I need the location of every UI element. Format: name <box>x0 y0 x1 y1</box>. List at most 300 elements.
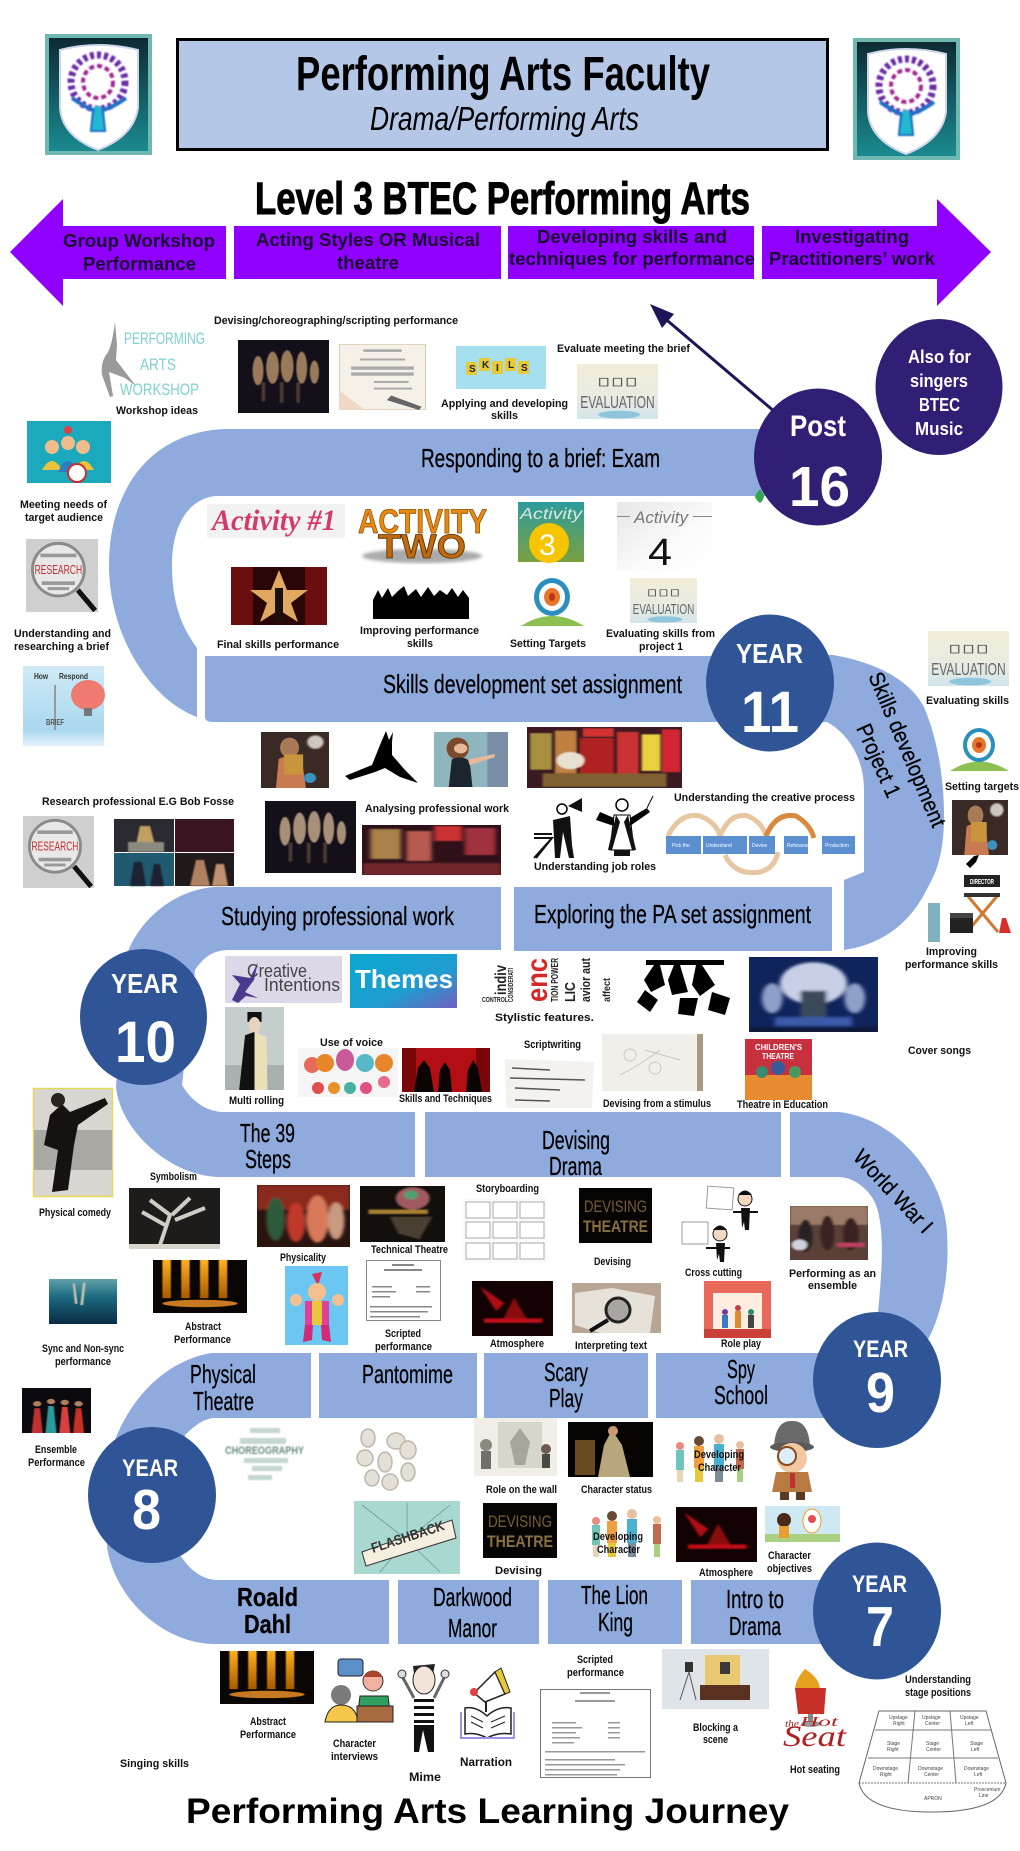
caption: Devising <box>594 1256 631 1268</box>
caption: Improving <box>926 946 977 958</box>
image: word cloud: CONSIDERATI <box>508 968 515 1002</box>
caption: Theatre in Education <box>737 1099 828 1111</box>
caption: scene <box>703 1734 728 1746</box>
caption: Scriptwriting <box>524 1039 581 1051</box>
road labels: Darkwood <box>433 1582 512 1612</box>
caption: Physical comedy <box>39 1207 112 1219</box>
badge: year 9: YEAR <box>853 1336 908 1363</box>
caption: project 1 <box>639 641 683 653</box>
badge: year 7: YEAR <box>852 1571 907 1598</box>
diagram: creative process: Understand <box>706 843 732 849</box>
caption: interviews <box>331 1751 378 1763</box>
image: performing arts workshop logo: ARTS <box>140 355 176 374</box>
diagram: creative process: Rehearse <box>787 843 809 849</box>
badge: year 8: YEAR <box>122 1455 178 1482</box>
road labels: Studying professional work <box>221 901 455 931</box>
image: activity 4: Activity <box>633 508 689 527</box>
road labels: World War I <box>848 1144 938 1238</box>
caption: Scripted <box>385 1328 421 1340</box>
image: the hot seat <box>783 1669 847 1753</box>
image: multi rolling <box>225 1007 284 1090</box>
image: crowd silhouette <box>373 586 469 619</box>
image: singer on stage <box>261 732 329 788</box>
road labels: Project 1 <box>851 720 906 801</box>
diagram: stage positions: Right <box>887 1747 899 1753</box>
caption: researching a brief <box>14 641 109 653</box>
caption: Narration <box>460 1755 512 1769</box>
caption: Abstract <box>185 1321 221 1333</box>
purple double arrow: Investigating <box>795 227 909 247</box>
diagram: creative process: Devise <box>752 843 768 849</box>
caption: objectives <box>767 1563 812 1575</box>
caption: Atmosphere <box>490 1338 544 1350</box>
image: children's theatre <box>745 1039 812 1100</box>
image: character figures <box>592 1509 661 1557</box>
image: the hot seat: the <box>785 1719 800 1730</box>
badge: also for singers <box>876 319 1002 455</box>
caption: performance <box>375 1341 432 1353</box>
image: physicality <box>257 1185 350 1247</box>
badge: year 11: YEAR <box>736 638 803 669</box>
image: character interview <box>325 1659 393 1722</box>
image: how to respond: Respond <box>59 672 88 681</box>
road labels: Exploring the PA set assignment <box>534 899 812 929</box>
caption: Meeting needs of <box>20 499 107 511</box>
image: dancers <box>238 340 329 413</box>
image: devising theatre: DEVISING <box>488 1512 552 1531</box>
image: target character <box>950 728 1009 771</box>
caption: Performance <box>28 1457 85 1469</box>
image: detective <box>770 1421 814 1500</box>
caption <box>905 946 998 971</box>
image: atmosphere <box>676 1507 757 1562</box>
caption: Setting targets <box>945 781 1019 793</box>
badge: year 11 <box>706 614 834 752</box>
road labels: Spy <box>727 1354 755 1384</box>
badge: year 7: 7 <box>866 1595 894 1659</box>
image: creative intentions: Intentions <box>264 975 340 995</box>
image: script page <box>366 1260 440 1320</box>
caption: Performance <box>174 1334 231 1346</box>
caption: Symbolism <box>150 1171 197 1183</box>
image: musical show <box>749 957 878 1032</box>
image: how to respond <box>23 666 105 746</box>
image: word cloud: enc <box>521 958 554 1002</box>
image: research magnifier <box>26 539 98 612</box>
caption: Blocking a <box>693 1722 739 1734</box>
diagram: stage positions: Line <box>979 1793 989 1799</box>
image: facial expressions <box>357 1429 416 1490</box>
diagram: stage positions: Downstage <box>964 1766 989 1772</box>
caption: Cover songs <box>908 1045 971 1057</box>
image: flashback banner <box>354 1501 460 1574</box>
image: symbolism <box>129 1188 220 1249</box>
caption <box>693 1722 739 1746</box>
caption: Atmosphere <box>699 1567 753 1579</box>
diagram: stage positions: Upstage <box>889 1715 908 1721</box>
caption: Character status <box>581 1484 652 1496</box>
image: creative intentions <box>225 956 342 1003</box>
diagram: creative process: Production <box>825 843 849 849</box>
diagram: stage positions: Left <box>971 1747 980 1753</box>
image: hand writing script <box>339 344 426 410</box>
caption: Physicality <box>280 1252 327 1264</box>
image: sync swimmers <box>49 1279 117 1324</box>
caption: Ensemble <box>35 1444 77 1456</box>
caption: skills <box>407 638 433 650</box>
badge: year 10 <box>80 949 207 1085</box>
image: devising theatre: THEATRE <box>583 1217 648 1236</box>
diagram: stage positions: Downstage <box>918 1766 943 1772</box>
image: character figures: Character <box>597 1544 641 1556</box>
image: performing arts workshop logo: WORKSHOP <box>120 380 199 399</box>
diagram: stage positions: Upstage <box>922 1715 941 1721</box>
image: children's theatre: THEATRE <box>762 1052 795 1061</box>
badge: also for singers: BTEC <box>919 395 960 415</box>
image: evaluation <box>630 578 697 623</box>
road labels: Play <box>549 1383 583 1413</box>
image: target character <box>521 578 584 626</box>
title box: Drama/Performing Arts <box>370 100 639 137</box>
image: narration book <box>461 1668 514 1738</box>
image: word cloud: affect <box>602 977 613 1002</box>
image: activity two: TWO <box>378 528 466 566</box>
caption: Setting Targets <box>510 638 586 650</box>
image: role play stage <box>704 1281 771 1338</box>
caption: Singing skills <box>120 1758 189 1770</box>
badge: year 9: 9 <box>866 1361 895 1425</box>
image: activity 3: 3 <box>539 529 556 562</box>
purple double arrow: Performance <box>83 254 196 274</box>
image: ensemble performance <box>22 1388 91 1433</box>
image: interpreting text <box>572 1283 661 1333</box>
logo left <box>45 34 152 155</box>
diagram: stage positions: Right <box>880 1772 892 1778</box>
road labels: Skills development set assignment <box>383 669 683 699</box>
caption: Devising/choreographing/scripting performance <box>214 315 458 327</box>
image: performing arts workshop logo: PERFORMING <box>124 329 205 348</box>
caption: Understanding job roles <box>534 861 656 873</box>
learning journey road <box>107 429 948 1644</box>
road labels: Responding to a brief: Exam <box>421 443 660 473</box>
image: abstract performance <box>153 1260 247 1313</box>
caption: Hot seating <box>790 1764 840 1776</box>
caption: Character <box>768 1550 812 1562</box>
image: skills silhouettes on red <box>402 1048 490 1092</box>
caption: Applying and developing <box>441 398 568 410</box>
caption: Sync and Non-sync <box>42 1343 124 1355</box>
caption: skills <box>491 410 518 422</box>
caption: Use of voice <box>320 1037 383 1049</box>
caption <box>567 1654 624 1679</box>
diagram: stage positions: Upstage <box>960 1715 979 1721</box>
caption: Understanding the creative process <box>674 792 855 804</box>
image: skills tiles: S <box>469 364 476 375</box>
badge: year 7 <box>813 1542 941 1680</box>
image: singer on stage <box>952 800 1008 855</box>
caption: Understanding and <box>14 628 111 640</box>
image: character status <box>568 1422 653 1477</box>
badge: also for singers: Music <box>915 419 963 439</box>
image: word cloud: avior aut <box>578 957 593 1002</box>
image: creative intentions: Creative <box>247 961 307 981</box>
road labels: Physical <box>190 1359 256 1389</box>
caption <box>20 499 107 524</box>
image: star performer <box>231 567 327 625</box>
caption: Role play <box>721 1338 762 1350</box>
road labels: Steps <box>245 1144 291 1174</box>
caption <box>240 1716 296 1741</box>
logo right <box>853 38 960 160</box>
road labels: School <box>714 1380 768 1410</box>
diagram: stage positions: Stage <box>926 1741 939 1747</box>
image: director's chair, clapper and megaphone: DIRECTOR <box>970 879 994 886</box>
diagram: stage positions: Left <box>965 1721 974 1727</box>
image: activity 4: 4 <box>648 532 672 574</box>
image: the hot seat: Hot <box>798 1715 840 1730</box>
caption: Abstract <box>250 1716 286 1728</box>
image: activity two: ACTIVITY <box>358 503 487 541</box>
purple double arrow <box>10 199 991 306</box>
image: devising theatre: DEVISING <box>584 1197 647 1216</box>
image: devising theatre <box>579 1188 652 1243</box>
image: script page <box>540 1690 650 1778</box>
image: skills tiles: I <box>496 363 499 374</box>
image: how to respond: BRIEF <box>46 718 64 727</box>
image: character figures: Character <box>698 1462 742 1474</box>
caption: performance skills <box>905 959 998 971</box>
road labels: Devising <box>542 1125 610 1155</box>
caption: Role on the wall <box>486 1484 557 1496</box>
diagram: stage positions: Center <box>925 1721 940 1727</box>
image: devising theatre <box>483 1503 557 1558</box>
image: the hot seat: Seat <box>783 1720 847 1753</box>
image: director's chair, clapper and megaphone <box>928 875 1011 942</box>
caption: Performance <box>240 1729 296 1741</box>
diagram: creative process: Pick the <box>672 843 690 849</box>
caption: Stylistic features. <box>495 1012 594 1024</box>
diagram: stage positions: Stage <box>970 1741 983 1747</box>
title box <box>178 40 828 150</box>
caption: Multi rolling <box>229 1095 284 1107</box>
image: character figures: Developing <box>593 1531 643 1543</box>
image: themes <box>350 954 457 1008</box>
badge: year 10: YEAR <box>111 968 178 999</box>
road labels: Dahl <box>244 1609 291 1639</box>
diagram: stage positions: Left <box>974 1772 983 1778</box>
image: physical comedy <box>34 1088 112 1196</box>
diagram: stage positions: Proscenium <box>974 1787 1000 1793</box>
road labels: The Lion <box>581 1580 648 1610</box>
badge: also for singers: singers <box>910 371 968 391</box>
image: character figures: Developing <box>694 1449 744 1461</box>
diagram: stage positions: APRON <box>924 1796 942 1802</box>
image: leaping dancer <box>345 731 418 783</box>
image: activity 4 <box>617 502 712 574</box>
caption: Devising <box>495 1565 542 1577</box>
road labels: The 39 <box>240 1118 295 1148</box>
image: skills tiles: K <box>482 360 490 371</box>
image: dancers <box>265 801 356 873</box>
image: character figures <box>676 1434 744 1482</box>
caption: Workshop ideas <box>116 405 198 417</box>
image: themes: Themes <box>355 964 453 994</box>
caption <box>375 1328 432 1353</box>
caption: performance <box>567 1667 624 1679</box>
caption <box>789 1268 876 1292</box>
heading: Level 3 BTEC: Level 3 BTEC Performing Arts <box>255 173 750 224</box>
caption <box>14 628 111 653</box>
caption <box>905 1674 971 1699</box>
caption: Storyboarding <box>476 1183 539 1195</box>
image: stimulus sketch <box>602 1034 703 1091</box>
purple double arrow: theatre <box>337 253 399 273</box>
caption: performance <box>55 1356 111 1368</box>
caption: ensemble <box>808 1280 857 1292</box>
diagram: stage positions <box>859 1711 1006 1812</box>
caption: Evaluating skills from <box>606 628 715 640</box>
road labels: Theatre <box>193 1386 254 1416</box>
image: performing arts workshop logo <box>102 322 205 399</box>
diagram: creative process <box>666 815 855 873</box>
image: broadway street <box>362 825 501 875</box>
image: handwritten script <box>505 1059 594 1108</box>
image: fosse collage <box>114 819 234 886</box>
purple double arrow: Practitioners’ work <box>769 249 936 269</box>
caption: Research professional E.G Bob Fosse <box>42 796 234 808</box>
caption: Evaluating skills <box>926 695 1009 707</box>
road labels: Scary <box>544 1357 588 1387</box>
image: small dancer <box>966 855 979 868</box>
image: use of voice <box>298 1048 398 1097</box>
diagram: stage positions: Downstage <box>873 1766 898 1772</box>
caption <box>28 1444 85 1469</box>
image: director and conductor <box>534 796 653 858</box>
purple double arrow: Developing skills and <box>537 227 727 247</box>
image: abstract performance <box>220 1651 314 1704</box>
caption: Technical Theatre <box>371 1244 448 1256</box>
image: word cloud: LIC <box>562 982 579 1002</box>
image: activity 3: Activity <box>519 506 583 523</box>
caption <box>360 625 479 650</box>
image: target audience <box>27 421 111 483</box>
road labels: Drama <box>549 1151 602 1181</box>
badge: year 9 <box>813 1312 941 1448</box>
road labels: Manor <box>448 1613 497 1643</box>
badge: year 8: 8 <box>132 1478 161 1542</box>
diagram: stage positions: Stage <box>887 1741 900 1747</box>
image: activity two <box>358 503 487 566</box>
image: mime <box>398 1664 449 1752</box>
image: how to respond: How <box>34 672 49 681</box>
road labels: Skills development <box>863 668 951 831</box>
road labels <box>190 443 951 1643</box>
caption: Evaluate meeting the brief <box>557 343 690 355</box>
caption: Cross cutting <box>685 1267 742 1279</box>
purple double arrow: techniques for performance <box>509 249 755 269</box>
image: flashback banner: FLASHBACK <box>369 1517 446 1556</box>
road labels: King <box>598 1607 633 1637</box>
image: technical theatre <box>360 1186 445 1242</box>
image: word cloud: TION POWER <box>550 957 561 1002</box>
caption: Improving performance <box>360 625 479 637</box>
arrow: post 16 to level 3 <box>650 304 775 412</box>
caption <box>42 1343 124 1368</box>
image: stage lights <box>637 960 730 1016</box>
image: skills tiles <box>456 346 546 389</box>
caption: Analysing professional work <box>365 803 510 815</box>
caption <box>441 398 568 422</box>
image: choreography word cloud: CHOREOGRAPHY <box>225 1445 305 1457</box>
image: performing ensemble <box>790 1206 868 1260</box>
caption: Final skills performance <box>217 639 339 651</box>
image: evaluation <box>577 364 658 419</box>
title box: Performing Arts Faculty <box>296 48 710 101</box>
caption: Mime <box>409 1770 441 1784</box>
caption <box>767 1550 812 1575</box>
caption: Scripted <box>577 1654 613 1666</box>
diagram: stage positions: Center <box>924 1772 939 1778</box>
image: skills tiles: L <box>508 360 514 371</box>
image: role on the wall <box>474 1418 557 1476</box>
image: pantomime character <box>285 1266 348 1345</box>
badge: year 11: 11 <box>741 680 799 745</box>
badge: also for singers: Also for <box>908 347 971 367</box>
caption: Character <box>333 1738 377 1750</box>
caption: target audience <box>25 512 103 524</box>
purple double arrow: Acting Styles OR Musical <box>256 230 480 250</box>
caption: stage positions <box>905 1687 971 1699</box>
caption: Performing as an <box>789 1268 876 1280</box>
image: devising theatre: THEATRE <box>487 1532 553 1551</box>
diagram: stage positions: Right <box>893 1721 905 1727</box>
purple double arrow: Group Workshop <box>63 231 215 251</box>
image: word cloud: CONTROL <box>482 997 509 1004</box>
image: word cloud <box>482 957 613 1004</box>
road labels: Drama <box>729 1611 781 1641</box>
badge: post 16: Post <box>790 410 846 443</box>
image: research magnifier <box>23 816 94 888</box>
road labels: Pantomime <box>362 1359 453 1389</box>
badge: year 10: 10 <box>115 1010 176 1075</box>
image: activity 1: Activity #1 <box>210 504 336 537</box>
image: atmosphere <box>472 1281 553 1336</box>
caption <box>606 628 715 653</box>
badge: post 16: 16 <box>789 455 850 519</box>
image: word cloud: indiv <box>493 965 510 995</box>
image: cross cutting figures <box>682 1186 758 1262</box>
green dot <box>755 489 764 503</box>
image: evaluation <box>928 631 1009 686</box>
image: children's theatre: CHILDREN'S <box>755 1043 803 1052</box>
image: broadway signs <box>527 727 682 788</box>
footer title: Performing Arts Learning Journey <box>186 1792 790 1831</box>
road labels: Intro to <box>726 1584 784 1614</box>
image: woman singing <box>434 732 508 787</box>
caption <box>331 1738 378 1763</box>
image: activity 3 <box>518 502 584 563</box>
caption: Devising from a stimulus <box>603 1098 711 1110</box>
caption: Interpreting text <box>575 1340 647 1352</box>
image: storyboard sheet <box>463 1198 547 1263</box>
image: blocking a scene <box>662 1649 769 1709</box>
badge: year 8 <box>88 1427 216 1563</box>
image: character objectives <box>765 1506 840 1542</box>
image: skills tiles: S <box>521 363 528 374</box>
diagram: stage positions: Center <box>926 1747 941 1753</box>
caption: Skills and Techniques <box>399 1093 492 1105</box>
badge: post 16 <box>754 388 882 526</box>
